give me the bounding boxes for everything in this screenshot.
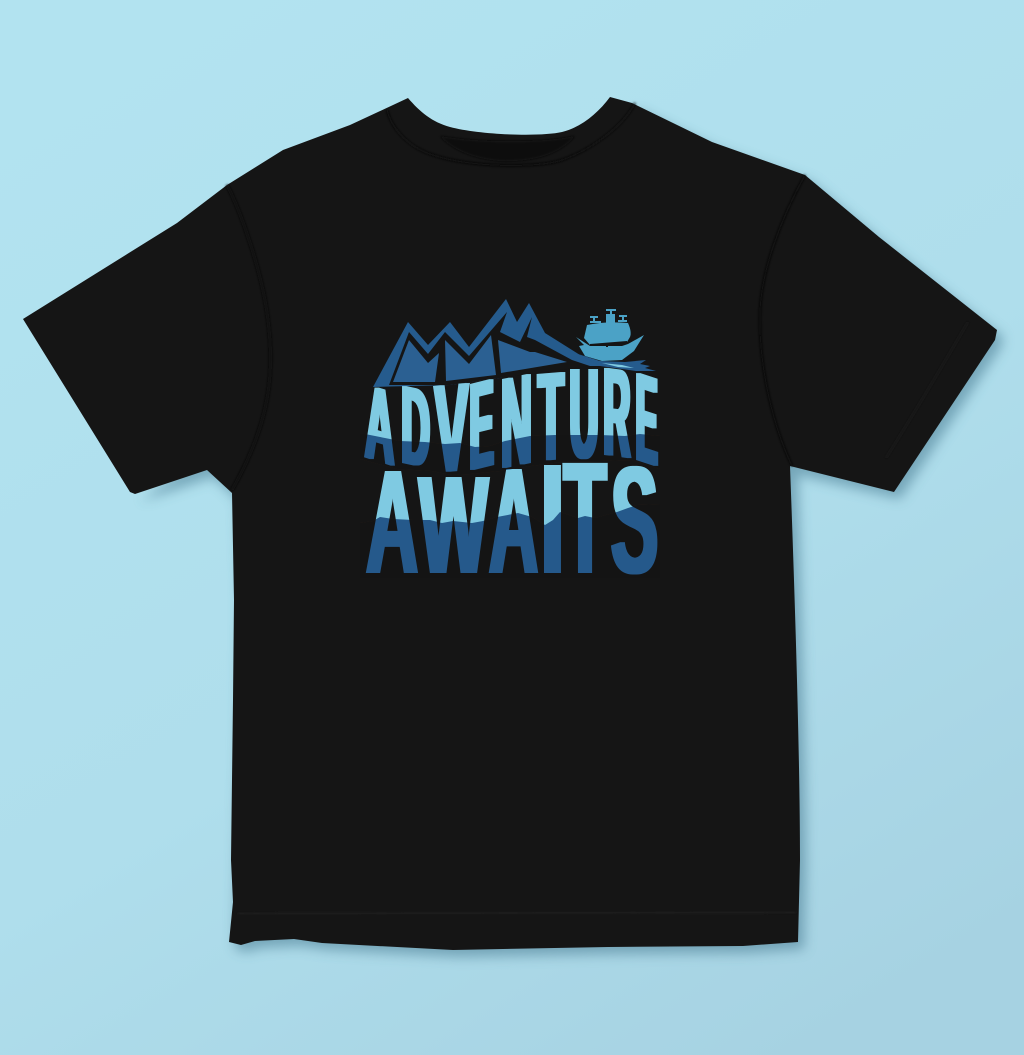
dark wave: [578, 354, 656, 371]
collar seam: [387, 103, 635, 165]
word: awaits: A: [489, 436, 539, 605]
mountain face centre: [445, 335, 496, 381]
mountain face right: [498, 340, 567, 373]
word: adventure: R: [604, 341, 630, 485]
shirt shadow: [141, 110, 1003, 957]
title: adventure awaits: [365, 341, 658, 608]
word: adventure: T: [538, 345, 564, 488]
word: adventure: E: [470, 352, 494, 498]
word: adventure: N: [501, 347, 532, 497]
word: adventure: A: [365, 362, 395, 490]
light wave crest: [602, 363, 634, 368]
word: adventure: U: [570, 342, 598, 486]
ship deck line: [590, 341, 627, 347]
left sleeve seam: [227, 185, 271, 490]
word: awaits: T: [564, 429, 607, 608]
ship hull: [576, 335, 644, 361]
waves under ship: [578, 354, 656, 371]
word: awaits: I: [540, 432, 565, 607]
wave patch under text: [360, 434, 660, 578]
ship centre turret: [606, 309, 616, 323]
icon: sailing ship: [576, 309, 644, 361]
wave tint over lower letters: [360, 434, 660, 578]
word: adventure: D: [401, 361, 430, 492]
right sleeve hem stitch: [886, 322, 968, 458]
word: adventure: V: [435, 357, 468, 501]
word: adventure: E: [636, 345, 657, 494]
word: awaits: A: [366, 438, 419, 605]
ship right turret: [618, 315, 627, 322]
mountain inner gap: [389, 312, 590, 385]
mountain silhouette: [373, 299, 606, 387]
word: awaits: W: [419, 447, 489, 603]
ship sails: [584, 322, 631, 345]
mountain face left: [393, 340, 439, 382]
bottom hem stitch: [238, 912, 796, 914]
shirt body: [23, 97, 997, 950]
mountains: [373, 299, 606, 387]
back neck shading: [440, 136, 575, 161]
word: awaits: S: [611, 436, 658, 606]
right sleeve seam: [760, 175, 805, 466]
t-shirt: [23, 97, 997, 950]
word: adventure: [365, 341, 657, 501]
word: awaits: [366, 429, 658, 608]
ship left turret: [590, 316, 601, 323]
